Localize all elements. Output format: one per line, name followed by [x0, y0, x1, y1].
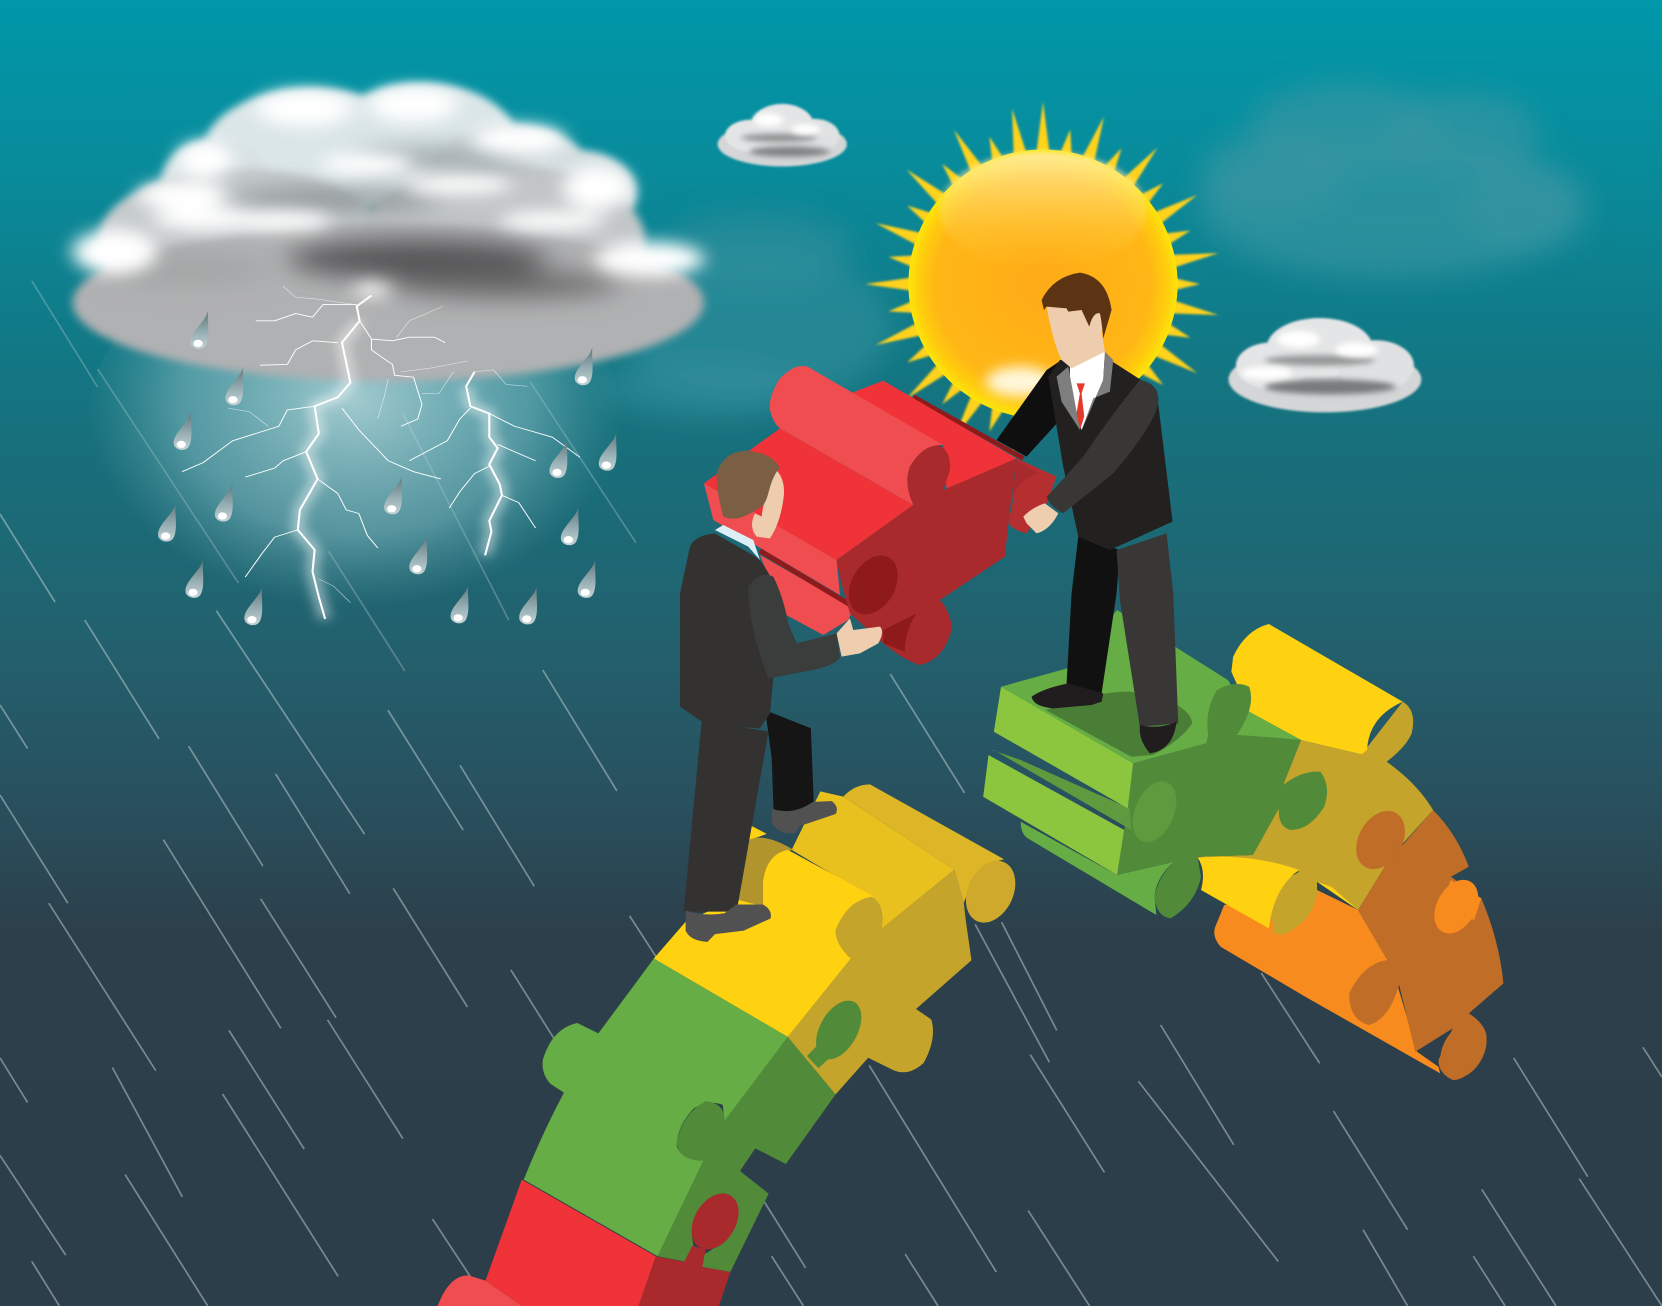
sun — [865, 102, 1220, 457]
lightning halo — [298, 321, 502, 619]
piece: red bottom — [438, 1180, 730, 1306]
man: right — [1023, 273, 1178, 753]
man: left — [680, 451, 882, 942]
puzzle bridge: left — [438, 784, 1024, 1306]
lightning glow — [85, 226, 624, 641]
piece: orange — [1214, 810, 1503, 1085]
hair — [717, 451, 780, 519]
front leg — [684, 721, 768, 912]
piece: yellow — [654, 784, 1024, 1094]
head — [1046, 303, 1105, 368]
hand — [837, 618, 882, 657]
piece: green — [983, 610, 1327, 918]
storm cloud — [73, 83, 704, 381]
back leg — [765, 710, 814, 814]
sun disc — [908, 149, 1178, 419]
storm: cloud, lightning and drops — [73, 83, 704, 641]
front arm — [1047, 380, 1158, 513]
lapels — [1057, 367, 1080, 430]
arm — [748, 575, 840, 678]
hand — [1023, 503, 1058, 533]
ear and neck — [752, 468, 784, 538]
piece: green — [524, 959, 836, 1272]
lightning bolts — [182, 286, 580, 619]
background cloud: faint centre — [601, 213, 890, 417]
shoes — [1032, 683, 1103, 708]
raindrops — [158, 310, 617, 625]
background cloud: large faint right — [1200, 83, 1588, 279]
legs — [1067, 537, 1120, 693]
small cloud: right — [1228, 318, 1421, 412]
sun rays — [865, 102, 1220, 457]
jacket — [680, 533, 780, 728]
jacket — [1048, 360, 1173, 550]
collar — [715, 525, 760, 560]
tie — [1076, 383, 1085, 430]
shirt — [1070, 352, 1105, 430]
shoes — [686, 801, 837, 942]
rain streaks — [0, 281, 1662, 1306]
red puzzle piece — [704, 366, 1057, 665]
man right: back arm — [997, 360, 1062, 457]
puzzle bridge: right — [983, 610, 1503, 1085]
piece: yellow — [1197, 624, 1433, 935]
hair — [1042, 273, 1112, 338]
small cloud: top centre — [718, 104, 847, 166]
